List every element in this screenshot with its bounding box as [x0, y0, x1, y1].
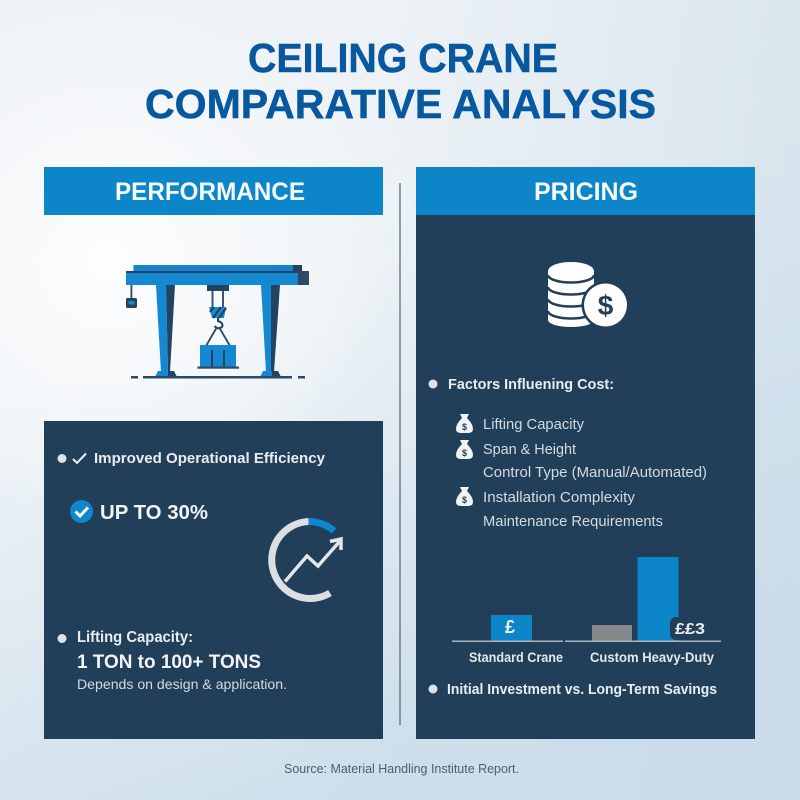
- panel: performance header: PERFORMANCE: [115, 178, 305, 206]
- source note: Source: Material Handling Institute Report.: [284, 762, 519, 776]
- icon: coins: $: [598, 290, 614, 321]
- icon: gantry crane: [126, 265, 309, 378]
- icon: money bag: $: [462, 422, 467, 432]
- icon: money bag: [456, 440, 473, 459]
- icon: money bag: $: [462, 448, 467, 458]
- bar chart: £: [505, 617, 515, 637]
- factors list: [483, 417, 707, 530]
- lifting capacity: [58, 629, 287, 692]
- bar chart: [452, 557, 721, 665]
- title: COMPARATIVE ANALYSIS: [145, 81, 656, 127]
- bar chart: Custom Heavy-Duty: [590, 650, 714, 665]
- pricing header: PRICING: [534, 178, 638, 206]
- savings note: Initial Investment vs. Long-Term Savings: [447, 681, 717, 698]
- title: [145, 35, 656, 127]
- lifting capacity: 1 TON to 100+ TONS: [77, 652, 261, 673]
- icon: growth gauge: [272, 521, 341, 598]
- lifting capacity: Depends on design & application.: [77, 676, 287, 692]
- bar chart: ££3: [675, 621, 705, 638]
- icon: money bag: $: [462, 495, 467, 505]
- stat: up to 30%: UP TO 30%: [100, 502, 208, 524]
- panel: pricing: [416, 167, 755, 739]
- title: CEILING CRANE: [248, 35, 558, 81]
- pricing header: [416, 167, 755, 215]
- panel: performance header: [44, 167, 383, 215]
- factors list: Control Type (Manual/Automated): [483, 465, 707, 481]
- icon: money bag: [456, 414, 473, 433]
- factors list: Maintenance Requirements: [483, 514, 663, 530]
- icon: money bag: [456, 487, 473, 506]
- lifting capacity: Lifting Capacity:: [77, 629, 193, 646]
- factors list: Lifting Capacity: [483, 417, 585, 433]
- efficiency item: Improved Operational Efficiency: [94, 450, 326, 467]
- factors list: Span & Height: [483, 442, 576, 458]
- factors list: Installation Complexity: [483, 490, 636, 506]
- factors heading: Factors Influening Cost:: [448, 376, 614, 393]
- bar chart: Standard Crane: [469, 650, 563, 665]
- icon: coins: [548, 262, 630, 329]
- panel: performance details: [44, 421, 383, 739]
